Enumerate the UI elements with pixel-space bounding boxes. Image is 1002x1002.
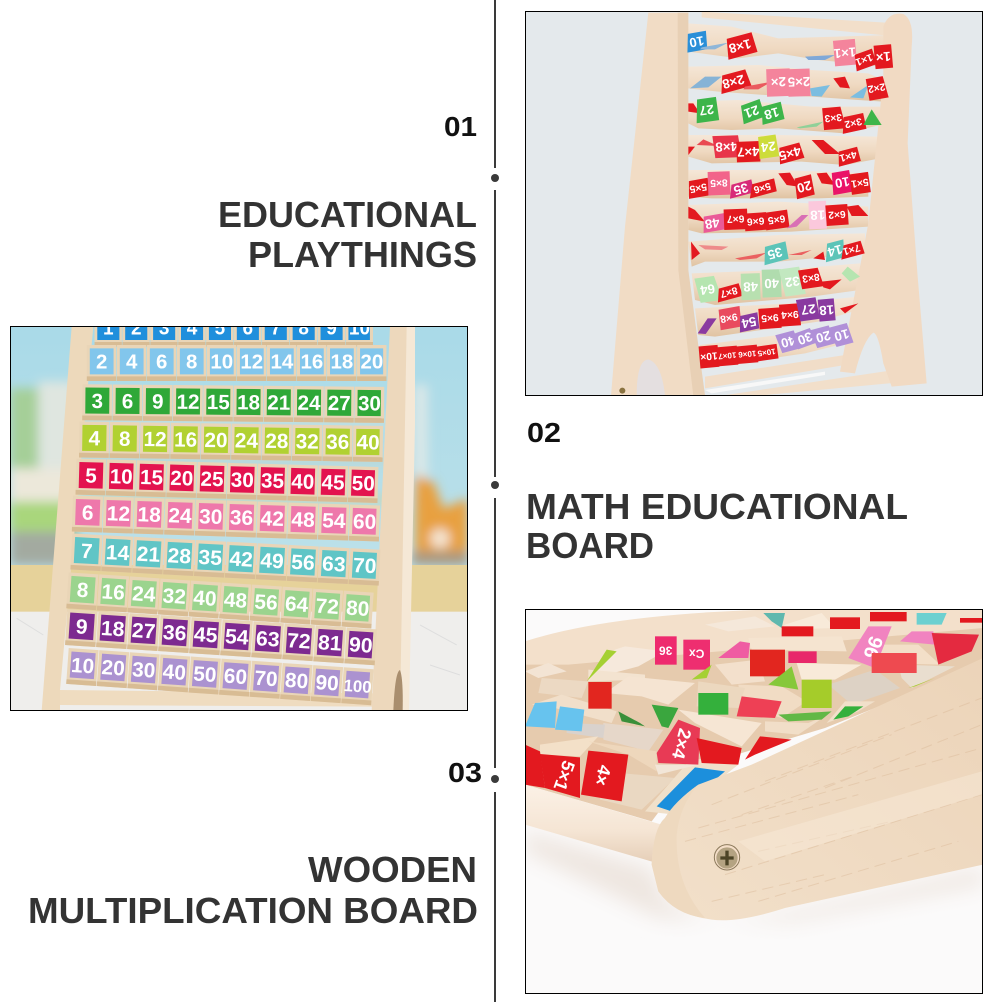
number tiles row 2: 16 (301, 351, 323, 374)
number tiles row 1: 3 (159, 317, 169, 340)
number tiles row 6: 36 (229, 506, 254, 530)
number tiles row 3: 21 (267, 391, 290, 415)
number tiles row 3: 3 (91, 390, 103, 413)
left side leg (611, 13, 705, 396)
number tiles row 6: 6 (81, 502, 94, 525)
number tiles row 3: 15 (207, 391, 230, 414)
number tiles row 1: 4 (187, 317, 197, 340)
multiplication labels, upside-down faces: 40 (764, 276, 779, 291)
number tiles row 3: 30 (358, 392, 381, 415)
number tiles row 5: 40 (291, 470, 315, 494)
number tiles row 10: 30 (131, 658, 156, 683)
number tiles row 10 (66, 654, 373, 703)
panel: angled view of the board showing multiplication faces (525, 10, 983, 396)
number tiles row 8: 72 (315, 595, 340, 619)
number tiles row 4: 12 (143, 428, 167, 451)
multiplication labels, upside-down faces: 10 (833, 326, 851, 344)
coloured block faces: 36 (659, 644, 672, 658)
number tiles row 7: 70 (352, 554, 377, 578)
number tiles row 6: 24 (168, 504, 192, 528)
number tiles row 5: 5 (85, 464, 97, 488)
number tiles row 5: 10 (109, 465, 133, 489)
large side leg with wood grain (652, 658, 983, 920)
number tiles row 1: 7 (270, 317, 281, 340)
multiplication labels, upside-down faces: 8×7 (719, 284, 739, 299)
multiplication labels, upside-down faces: 64 (699, 281, 716, 298)
panel border: angled view (526, 12, 982, 396)
multiplication labels, upside-down faces: 7×1 (841, 241, 861, 257)
multiplication labels, upside-down faces: 2×2 (867, 80, 886, 94)
multiplication labels, upside-down faces: 27 (698, 102, 715, 119)
number tiles row 6: 18 (137, 503, 161, 527)
number tiles row 2: 4 (126, 351, 138, 374)
multiplication labels, upside-down faces: 3×2 (843, 115, 863, 129)
multiplication labels, upside-down faces: 4×1 (838, 148, 858, 163)
multiplication labels, upside-down faces: 5×1 (850, 176, 869, 189)
heading: educational playthings (218, 194, 477, 275)
number tiles row 3: 24 (297, 392, 321, 415)
number tiles row 6: 54 (322, 509, 346, 533)
number tiles row 9: 81 (317, 631, 343, 656)
number tiles row 5: 35 (261, 469, 284, 493)
number tiles row 8: 40 (193, 586, 217, 611)
number tiles row 10: 70 (254, 667, 278, 691)
panel border: close-up (526, 610, 982, 994)
number tiles row 8: 16 (101, 580, 126, 605)
multiplication labels, upside-down faces: 20 (814, 328, 832, 346)
number tiles row 7: 49 (260, 549, 284, 573)
multiplication labels, upside-down faces: 35 (766, 244, 784, 263)
number tiles row 1: 6 (243, 317, 253, 340)
multiplication labels, upside-down faces: 2×8 (721, 72, 746, 92)
number tiles row 4: 28 (265, 430, 289, 453)
multiplication labels, upside-down faces: 9×4 (781, 308, 799, 320)
number tiles row 10: 80 (284, 669, 309, 693)
number tiles row 9: 9 (75, 616, 88, 639)
multiplication labels, upside-down faces: 4×8 (715, 139, 738, 155)
number tiles row 6 (72, 501, 380, 539)
multiplication labels, upside-down faces: 21 (742, 102, 761, 121)
left leg inner face and arch (619, 13, 705, 396)
multiplication labels, upside-down faces: 10×7 (717, 350, 737, 361)
multiplication labels, upside-down faces: 6×5 (767, 212, 786, 226)
multiplication labels, upside-down faces: 4×5 (777, 143, 803, 164)
step number 03: 03 (448, 757, 482, 788)
number tiles row 4: 36 (326, 431, 349, 454)
number tiles row 4: 4 (88, 427, 101, 450)
multiplication labels, upside-down faces: 18 (810, 207, 825, 223)
multiplication labels, upside-down faces: 10×6 (737, 349, 757, 359)
number tiles row 9: 54 (224, 625, 250, 650)
multiplication labels, upside-down faces: 8×5 (710, 176, 728, 188)
number tiles row 6: 48 (291, 508, 315, 532)
multiplication labels, upside-down faces: 48 (704, 215, 721, 232)
number tiles row 1 (94, 327, 373, 347)
number tiles row 2: 6 (156, 351, 167, 374)
number tiles row 7: 56 (291, 551, 315, 575)
multiplication labels, upside-down faces: 48 (743, 279, 758, 295)
number tiles row 6: 42 (260, 507, 284, 531)
multiplication labels, upside-down faces: 20 (795, 178, 813, 196)
panel: front view of the colour number board (10, 317, 468, 712)
number tiles row 4: 32 (296, 430, 319, 454)
heading: wooden multiplication board (28, 849, 478, 931)
number tiles row 4: 24 (235, 429, 259, 453)
number tiles row 1: 5 (215, 317, 225, 340)
multiplication labels, upside-down faces: 10×5 (756, 347, 776, 358)
multiplication labels, upside-down faces: 2×5 (788, 74, 810, 90)
heading: wooden multiplication board: MULTIPLICATION BOARD (28, 890, 478, 931)
heading: math educational board (526, 486, 908, 566)
pale grey background (525, 10, 983, 396)
number tiles row 9: 72 (286, 629, 311, 654)
multiplication labels, upside-down faces: 4×7 (737, 144, 760, 160)
number tiles row 4: 40 (356, 431, 380, 455)
wooden block rows (688, 23, 890, 368)
coloured block faces: 5×1 (550, 758, 579, 793)
multiplication labels, upside-down faces: 5×6 (752, 180, 772, 195)
multiplication labels, upside-down faces: 10× (700, 349, 718, 362)
multiplication labels, upside-down faces: 18 (763, 104, 781, 123)
number tiles row 2: 20 (361, 351, 383, 374)
screw on the leg (714, 845, 740, 870)
number tiles row 8 (66, 578, 373, 626)
number tiles row 8: 80 (345, 597, 370, 621)
right side leg (840, 14, 927, 387)
number tiles row 7: 28 (167, 544, 192, 568)
number tiles row 2: 8 (186, 351, 197, 374)
number tiles row 4: 16 (174, 429, 197, 452)
number tiles row 9: 18 (100, 617, 125, 641)
number tiles row 2: 14 (270, 351, 294, 374)
white tabletop background (525, 608, 983, 994)
multiplication labels, upside-down faces: 27 (800, 301, 817, 318)
number tiles row 5: 15 (140, 466, 163, 490)
multiplication labels, upside-down faces: 35 (732, 180, 750, 198)
number tiles row 4: 20 (204, 429, 228, 452)
multiplication labels, upside-down faces: 10 (688, 33, 705, 50)
number tiles row 7: 21 (136, 543, 161, 567)
coloured block faces: 4× (590, 763, 615, 788)
multiplication labels, upside-down faces: 2× (770, 74, 786, 90)
number tiles row 9 (65, 615, 377, 663)
multiplication labels, upside-down faces: 30 (796, 329, 814, 348)
number tiles row 3: 6 (122, 390, 133, 413)
number tiles row 3: 9 (152, 390, 164, 414)
number tiles row 2: 10 (210, 351, 233, 374)
multiplication labels, upside-down faces: 40 (779, 333, 797, 351)
number tiles row 1: 9 (326, 317, 337, 340)
multiplication labels, upside-down faces: 1×1 (833, 44, 857, 61)
multiplication labels, upside-down faces: 32 (784, 273, 801, 290)
number tiles row 8: 48 (223, 588, 248, 613)
multiplication labels, upside-down faces: 9×8 (719, 310, 738, 324)
number tiles row 3: 18 (237, 391, 260, 414)
timeline vertical line with dots (491, 0, 499, 1002)
number tiles row 5 (76, 464, 378, 501)
number tiles row 9: 36 (162, 621, 187, 645)
number tiles row 5: 50 (352, 472, 375, 496)
number tiles row 2: 18 (331, 351, 353, 374)
multiplication labels, upside-down faces: 1×8 (727, 36, 753, 56)
number tiles row 8: 24 (131, 582, 157, 607)
number tiles row 6: 60 (353, 510, 377, 534)
number tiles row 8: 64 (284, 593, 309, 617)
multiplication labels, upside-down faces: 9×5 (761, 311, 779, 323)
multiplication labels, upside-down faces: 18 (819, 302, 835, 318)
number tiles row 5: 30 (231, 469, 254, 492)
number tiles row 6: 30 (199, 505, 223, 529)
number tiles row 7: 7 (80, 540, 93, 563)
heading: educational playthings: EDUCATIONAL (218, 194, 477, 235)
multiplication labels, upside-down faces (684, 31, 893, 368)
number tiles row 1: 10 (349, 317, 370, 340)
number tiles row 5: 25 (200, 468, 224, 491)
number tiles row 9: 90 (348, 633, 373, 658)
number tiles row 8: 32 (162, 584, 187, 609)
number tiles row 7: 14 (105, 541, 130, 565)
number tiles row 1: 2 (131, 317, 142, 340)
multiplication labels, upside-down faces: 5×5 (688, 180, 708, 194)
multiplication labels, upside-down faces: 1× (875, 49, 891, 65)
multiplication labels, upside-down faces: 24 (759, 138, 777, 155)
multiplication labels, upside-down faces: 6×2 (828, 208, 846, 220)
multiplication labels, upside-down faces: 14 (825, 242, 844, 260)
number tiles row 3 (82, 390, 384, 421)
number tiles row 7 (70, 539, 380, 583)
number tiles row 6: 12 (106, 502, 130, 526)
number tiles row 9: 63 (255, 627, 280, 652)
number tiles row 2: 2 (96, 351, 107, 374)
number tiles row 10: 90 (315, 671, 340, 696)
coloured block faces: 96 (858, 633, 887, 661)
number tiles row 9: 27 (131, 619, 156, 643)
number tiles row 8: 56 (254, 591, 278, 615)
back rail (526, 610, 982, 665)
number tiles row 7: 35 (198, 546, 223, 570)
multiplication labels, upside-down faces: 3×3 (824, 111, 842, 123)
heading: math educational board: MATH EDUCATIONAL (526, 486, 908, 527)
wooden frame rails and rod (42, 327, 415, 711)
number tiles row 8: 8 (76, 579, 89, 602)
block jumble (525, 613, 983, 821)
number tiles row 3: 27 (328, 392, 351, 415)
number tiles row 10: 40 (162, 660, 187, 685)
number tiles row 7: 63 (322, 553, 346, 576)
number tiles row 2 (87, 351, 386, 379)
number tiles row 5: 20 (170, 467, 194, 491)
number tiles row 10: 100 (343, 676, 372, 697)
panel border: front view (10, 326, 468, 710)
number tiles row 1: 1 (103, 317, 114, 340)
coloured block faces (525, 612, 982, 811)
heading: educational playthings: PLAYTHINGS (248, 234, 477, 275)
back and bottom rods (702, 12, 907, 396)
number tiles row 4: 8 (119, 428, 131, 451)
step number 01: 01 (444, 111, 477, 142)
multiplication labels, upside-down faces: 54 (740, 314, 758, 331)
multiplication labels, upside-down faces: 10 (834, 174, 851, 191)
heading: wooden multiplication board: WOODEN (308, 849, 477, 890)
multiplication labels, upside-down faces: 6×7 (726, 212, 745, 224)
number tiles row 4 (79, 427, 383, 460)
number tiles row 10: 10 (70, 654, 95, 678)
number tiles row 3: 12 (176, 391, 200, 414)
number tiles row 2: 12 (240, 351, 263, 374)
multiplication labels, upside-down faces: 1×1 (854, 51, 874, 67)
soft shadow under the board (525, 831, 983, 921)
multiplication labels, upside-down faces: 6×6 (746, 214, 765, 227)
panel: close-up of the side leg and screw (526, 610, 982, 931)
multiplication labels, upside-down faces: 8×3 (801, 271, 820, 284)
number tiles row 10: 20 (101, 656, 126, 681)
front round rod (525, 785, 662, 862)
number tiles row 7: 42 (229, 548, 253, 572)
number tiles row 10: 60 (223, 665, 248, 689)
coloured block faces: Cx (689, 647, 704, 661)
number tiles row 5: 45 (321, 471, 345, 495)
number tiles row 10: 50 (192, 663, 217, 687)
coloured block faces: 2×4 (668, 726, 695, 761)
number tiles row 1: 8 (298, 317, 309, 340)
heading: math educational board: BOARD (526, 525, 654, 566)
step number 02: 02 (527, 417, 561, 448)
blurred room background (10, 325, 468, 712)
number tiles row 9: 45 (193, 623, 219, 648)
